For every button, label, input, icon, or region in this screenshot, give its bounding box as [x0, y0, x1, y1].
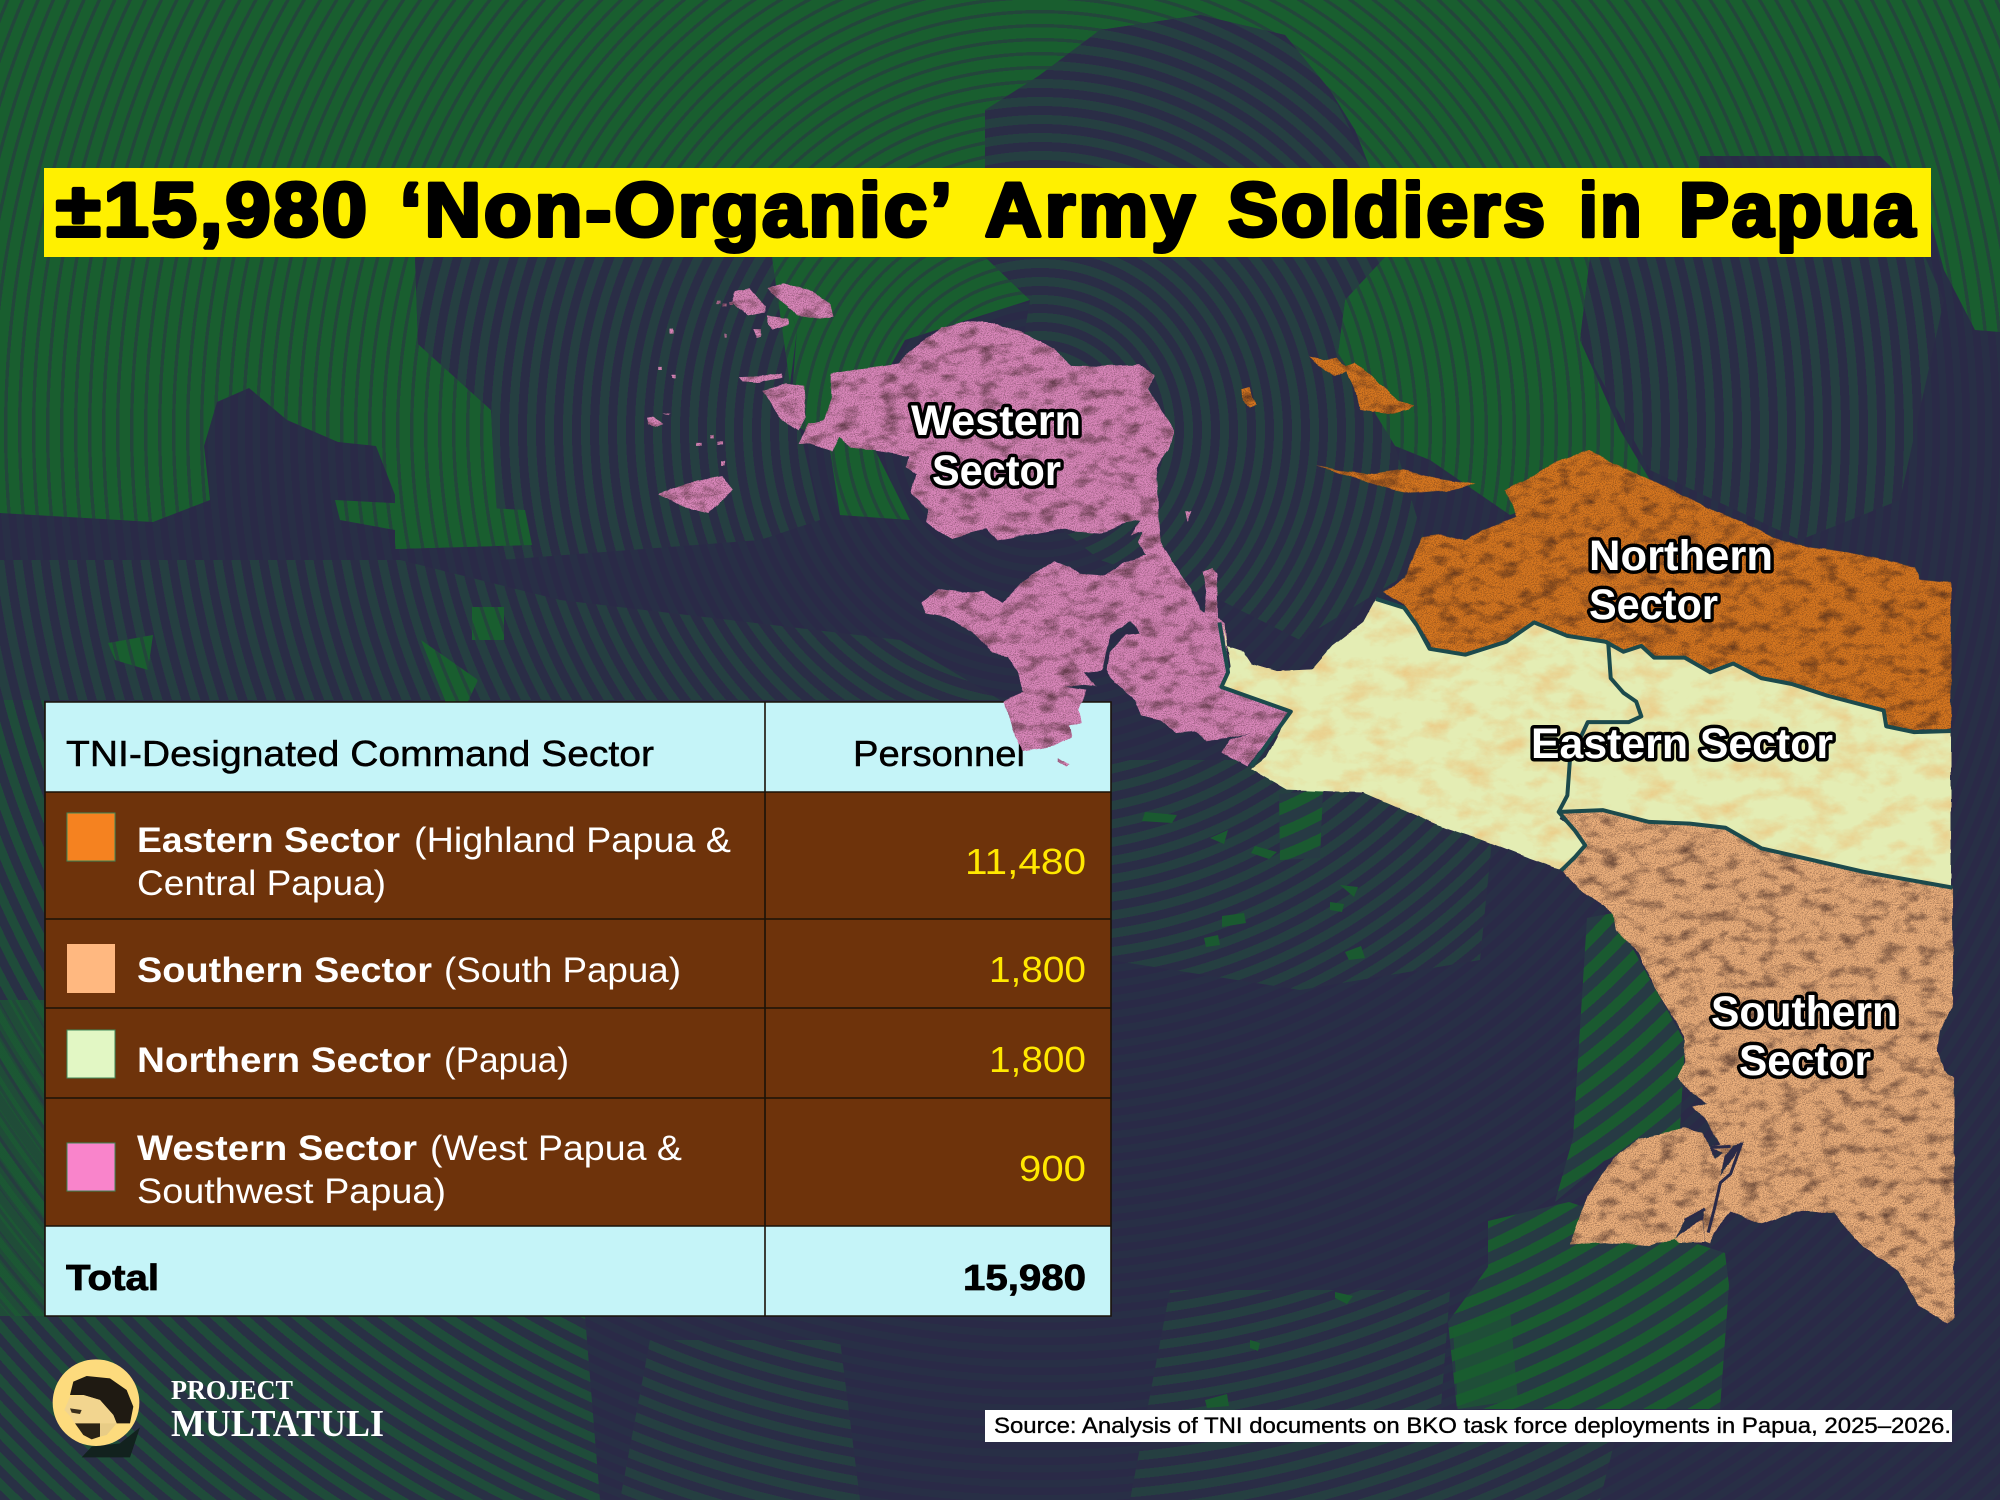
map label: Northern Sector: Sector — [1589, 581, 1718, 629]
row: Western Sector: (West Papua & — [430, 1129, 682, 1168]
row: Eastern Sector: Central Papua) — [137, 864, 386, 903]
row: Southern Sector: (South Papua) — [444, 951, 681, 990]
map label: Southern Sector — [1711, 988, 1898, 1085]
map label: Eastern Sector: Eastern Sector — [1531, 720, 1833, 768]
map label: Western Sector: Sector — [932, 447, 1061, 495]
table header — [66, 733, 1025, 774]
row: Southern Sector: 1,800 — [989, 949, 1086, 990]
row: Northern Sector: Northern Sector — [137, 1041, 431, 1080]
row: Western Sector: Western Sector — [137, 1129, 417, 1168]
map label: Southern Sector: Southern — [1711, 988, 1898, 1036]
row: Northern Sector — [67, 1030, 1086, 1080]
title banner: ±15,980 — [56, 168, 370, 253]
title banner — [44, 168, 1931, 257]
logo: Project Multatuli: MULTATULI — [171, 1403, 384, 1445]
row: Total — [66, 1257, 1086, 1298]
row: Eastern Sector: (Highland Papua & — [414, 821, 731, 860]
logo: Project Multatuli: PROJECT — [171, 1375, 293, 1405]
source note: Source: Analysis of TNI documents on BKO task force deployments in Papua, 2025–2026. — [994, 1413, 1951, 1438]
row: Southern Sector: Southern Sector — [137, 951, 432, 990]
row: Southern Sector — [67, 944, 1086, 993]
title banner: in — [1579, 168, 1644, 253]
icon: portrait medallion — [53, 1359, 140, 1457]
title banner: Army — [985, 168, 1198, 253]
row: Eastern Sector: Eastern Sector — [137, 821, 400, 860]
map region: Southern Sector — [1561, 810, 1954, 1324]
map label: Northern Sector: Northern — [1589, 532, 1773, 580]
table header: TNI-Designated Command Sector — [66, 733, 654, 774]
row: Northern Sector: 1,800 — [989, 1039, 1086, 1080]
row: Western Sector: 900 — [1019, 1148, 1086, 1189]
table header: Personnel — [853, 733, 1025, 774]
row: Total: Total — [66, 1257, 159, 1298]
row: Western Sector — [67, 1129, 1086, 1211]
map region: Northern Sector — [1241, 357, 1951, 731]
row: Eastern Sector — [67, 813, 1086, 903]
title banner: Soldiers — [1228, 168, 1548, 253]
logo: Project Multatuli — [53, 1359, 384, 1457]
title banner: Papua — [1679, 168, 1918, 253]
map label: Western Sector: Western — [911, 397, 1081, 445]
row: Eastern Sector: 11,480 — [965, 841, 1086, 882]
row: Total: 15,980 — [963, 1257, 1086, 1298]
title banner: ‘Non-Organic’ — [400, 168, 955, 253]
row: Northern Sector: (Papua) — [444, 1041, 569, 1080]
map label: Southern Sector: Sector — [1739, 1037, 1871, 1085]
map region: Western Sector — [647, 283, 1291, 767]
map: Papua sectors — [647, 283, 1954, 1324]
map label: Northern Sector — [1589, 532, 1773, 629]
table: personnel by command sector — [45, 702, 1111, 1316]
map label: Western Sector — [911, 397, 1081, 495]
map region: Eastern Sector — [1223, 599, 1951, 886]
row: Western Sector: Southwest Papua) — [137, 1172, 446, 1211]
